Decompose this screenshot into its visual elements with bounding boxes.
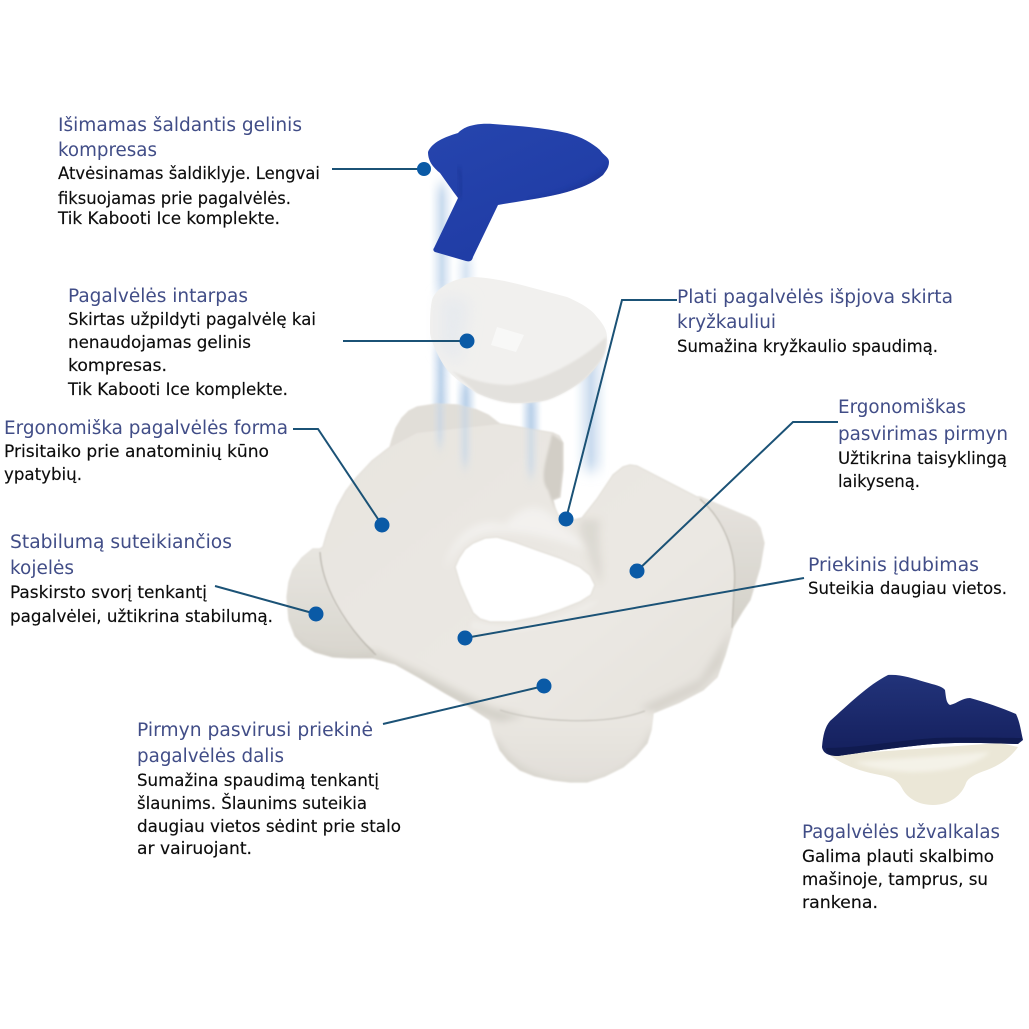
text block: gel compress: Išimamas šaldantis gelinis	[58, 115, 302, 136]
text block: stabilising feet: pagalvėlei, užtikrina stabilumą.	[10, 607, 273, 626]
text block: cover	[802, 822, 1000, 912]
text block: front recess	[808, 555, 1007, 598]
front foot	[490, 707, 655, 790]
text block: ergonomic shape: Ergonomiška pagalvėlės forma	[4, 418, 288, 439]
text block: cover: mašinoje, tamprus, su	[802, 870, 988, 889]
marker dots	[308, 162, 644, 694]
text block: forward sloping front: ar vairuojant.	[137, 839, 252, 858]
text block: ergonomic shape: ypatybių.	[4, 465, 82, 484]
text block: insert: Tik Kabooti Ice komplekte.	[67, 380, 288, 399]
text block: gel compress	[57, 115, 320, 228]
right lobe	[720, 520, 763, 626]
icon: main cushion	[280, 395, 770, 790]
text block: cover: Pagalvėlės užvalkalas	[802, 822, 1000, 843]
text block: gel compress: Tik Kabooti Ice komplekte.	[57, 209, 280, 228]
text block: gel compress: kompresas	[58, 140, 157, 161]
rim shade	[580, 519, 601, 574]
leader lines	[215, 169, 838, 724]
glow columns between cushion parts	[430, 185, 608, 485]
text block: forward tilt: Ergonomiškas	[838, 397, 966, 418]
navy cover	[822, 675, 1023, 756]
text block: forward sloping front: pagalvėlės dalis	[137, 746, 284, 767]
seam lines	[320, 552, 376, 655]
text block: forward tilt	[838, 397, 1008, 491]
text block: stabilising feet: Paskirsto svorį tenkantį	[10, 583, 207, 602]
text block: front recess: Priekinis įdubimas	[808, 555, 979, 576]
cushion silhouette	[287, 404, 764, 782]
text block: insert: Skirtas užpildyti pagalvėlę kai	[68, 310, 316, 329]
text block: stabilising feet: Stabilumą suteikiančios	[10, 532, 232, 553]
text block: forward tilt: laikyseną.	[838, 472, 920, 491]
text block: gel compress: fiksuojamas prie pagalvėlės.	[58, 189, 291, 208]
shading clipped to silhouette	[288, 422, 763, 782]
text block: cover: Galima plauti skalbimo	[802, 847, 994, 866]
text block: coccyx cutout: kryžkauliui	[677, 312, 776, 333]
text block: insert: Pagalvėlės intarpas	[68, 286, 248, 307]
front edge	[372, 650, 525, 722]
text block: cover: rankena.	[802, 893, 878, 912]
text block: ergonomic shape: Prisitaiko prie anatominių kūno	[4, 442, 269, 461]
back lobe	[490, 422, 494, 424]
text block: insert: nenaudojamas gelinis	[68, 333, 251, 352]
cream base	[830, 743, 1018, 805]
text block: coccyx cutout: Sumažina kryžkaulio spaudimą.	[677, 337, 938, 356]
text block: forward sloping front: daugiau vietos sėdint prie stalo	[137, 817, 401, 836]
text block: coccyx cutout	[677, 287, 953, 356]
text block: forward sloping front	[137, 720, 401, 858]
text block: forward sloping front: Pirmyn pasvirusi priekinė	[137, 720, 373, 741]
text block: forward sloping front: Sumažina spaudimą tenkantį	[137, 771, 379, 790]
text block: forward tilt: Užtikrina taisyklingą	[838, 449, 1007, 468]
left foot shade	[288, 592, 374, 657]
text block: coccyx cutout: Plati pagalvėlės išpjova skirta	[677, 287, 953, 308]
text block: insert	[67, 286, 316, 399]
blue glow over back of cushion	[432, 395, 540, 475]
icon: cushion insert	[430, 277, 607, 403]
text block: ergonomic shape	[4, 418, 288, 484]
text block: stabilising feet	[10, 532, 273, 626]
text block: front recess: Suteikia daugiau vietos.	[808, 579, 1007, 598]
icon: cushion with navy cover	[822, 675, 1023, 805]
channel wall	[544, 434, 563, 510]
text block: stabilising feet: kojelės	[10, 558, 74, 579]
text block: gel compress: Atvėsinamas šaldiklyje. Lengvai	[58, 164, 320, 183]
icon: blue gel compress	[428, 124, 610, 261]
rim highlight	[464, 510, 578, 544]
text block: insert: kompresas.	[68, 356, 167, 375]
bottom foot shadow	[500, 740, 646, 776]
text block: forward tilt: pasvirimas pirmyn	[838, 424, 1008, 445]
text block: forward sloping front: šlaunims. Šlaunims suteikia	[137, 794, 367, 813]
